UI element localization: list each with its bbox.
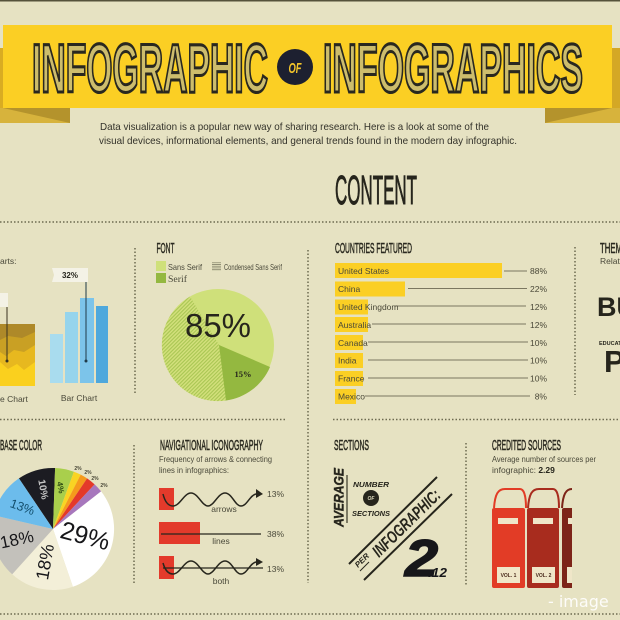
icon: both wave and line <box>159 556 284 586</box>
base color pie chart: 2% <box>91 476 99 482</box>
bar chart <box>50 268 108 403</box>
average lettering: AVERAGE <box>330 467 346 528</box>
icon: books <box>492 488 572 588</box>
number 2.12: 2 <box>404 530 438 588</box>
panel: sections <box>330 437 452 588</box>
intro text: visual devices, informational elements, and general trends found in the modern day infographic. <box>99 135 517 147</box>
font legend: Sans Serif <box>168 262 203 272</box>
icon: straight line: lines <box>212 536 230 546</box>
country bars <box>335 263 502 404</box>
panel: chart types <box>0 256 108 404</box>
title banner: INFOGRAPHIC <box>32 30 268 107</box>
base color pie chart: 4% <box>55 481 66 494</box>
country percentages: 8% <box>535 392 547 402</box>
book volume 3 <box>561 488 572 588</box>
font pie chart: 15% <box>234 369 252 379</box>
icon: both wave and line: both <box>213 576 230 586</box>
number of sections lettering <box>352 480 390 518</box>
panel: countries featured: COUNTRIES FEATURED <box>335 240 412 257</box>
per infographic lettering: INFOGRAPHIC: <box>368 486 445 561</box>
intro text <box>99 121 517 147</box>
watermark: - image <box>548 592 609 611</box>
icon: arrows wave: 13% <box>267 489 284 499</box>
country labels: United States <box>338 266 389 276</box>
per infographic lettering <box>349 477 452 580</box>
country labels: Canada <box>338 338 368 348</box>
country percentages: 12% <box>530 302 547 312</box>
country percentages <box>530 266 547 402</box>
title banner <box>0 25 620 123</box>
base color pie chart: 13% <box>8 496 37 518</box>
country labels: Mexico <box>338 392 365 402</box>
country percentages: 10% <box>530 356 547 366</box>
icon: arrows wave: arrows <box>211 504 237 514</box>
sources description: infographic: 2.29 <box>492 465 555 475</box>
navigation description: lines in infographics: <box>159 465 229 475</box>
number of sections lettering: NUMBER <box>353 480 390 489</box>
sources description <box>492 454 596 475</box>
font legend: Serif <box>168 274 187 284</box>
base color pie chart: 2% <box>100 483 108 489</box>
base color pie chart: 2% <box>84 470 92 476</box>
font legend: Condensed Sans Serif <box>224 262 282 272</box>
base color pie chart: 10% <box>35 479 50 500</box>
panel: base color <box>0 437 114 590</box>
country labels <box>338 266 398 402</box>
base color pie chart: 2% <box>74 466 82 472</box>
navigation description: Frequency of arrows & connecting <box>159 454 272 464</box>
font pie chart: 85% <box>185 307 251 344</box>
base color pie chart <box>0 466 114 590</box>
country percentages: 10% <box>530 338 547 348</box>
panel: credited sources <box>492 437 596 588</box>
panel: navigational iconography <box>159 437 284 586</box>
base color pie chart: 29% <box>57 516 113 556</box>
country labels: China <box>338 284 360 294</box>
country percentages: 12% <box>530 320 547 330</box>
sources description: Average number of sources per <box>492 454 596 464</box>
icon: straight line: 38% <box>267 529 284 539</box>
per infographic lettering: PER <box>353 551 371 569</box>
country labels: United Kingdom <box>338 302 398 312</box>
panel: font: FONT <box>156 240 174 257</box>
panel: base color: BASE COLOR <box>0 437 42 454</box>
country percentages: 10% <box>530 374 547 384</box>
country labels: France <box>338 374 365 384</box>
area chart <box>0 293 35 404</box>
number of sections lettering: OF <box>368 496 375 502</box>
country percentages: 88% <box>530 266 547 276</box>
panel: countries featured <box>335 240 547 404</box>
panel: sections: SECTIONS <box>334 437 369 454</box>
country percentages: 22% <box>530 284 547 294</box>
panel: chart types: arts: <box>0 256 17 266</box>
base color pie chart: 18% <box>32 542 58 581</box>
area chart: e Chart <box>0 394 29 404</box>
number 2.12: .12 <box>428 565 448 580</box>
book volume 2: VOL. 2 <box>536 573 552 579</box>
panel: font <box>156 240 282 401</box>
font legend <box>156 261 282 284</box>
country labels: Australia <box>338 320 371 330</box>
panel: navigational iconography: NAVIGATIONAL ICONOGRAPHY <box>160 437 263 454</box>
country labels: India <box>338 356 357 366</box>
panel: themes <box>597 240 620 379</box>
text: CONTENT <box>335 167 417 213</box>
navigation description <box>159 454 272 475</box>
book volume 1: VOL. 1 <box>501 573 517 579</box>
flag: 32%: 32% <box>62 271 78 280</box>
font pie chart <box>162 289 274 401</box>
intro text: Data visualization is a popular new way of sharing research. Here is a look at some of the <box>100 121 489 133</box>
bar chart: Bar Chart <box>61 393 98 403</box>
icon: both wave and line: 13% <box>267 564 284 574</box>
of badge: OF <box>288 60 302 77</box>
number of sections lettering: SECTIONS <box>352 509 390 518</box>
icon: arrows wave <box>159 488 284 514</box>
icon: straight line <box>159 522 284 546</box>
number 2.12 <box>404 530 448 588</box>
of badge <box>277 49 313 85</box>
